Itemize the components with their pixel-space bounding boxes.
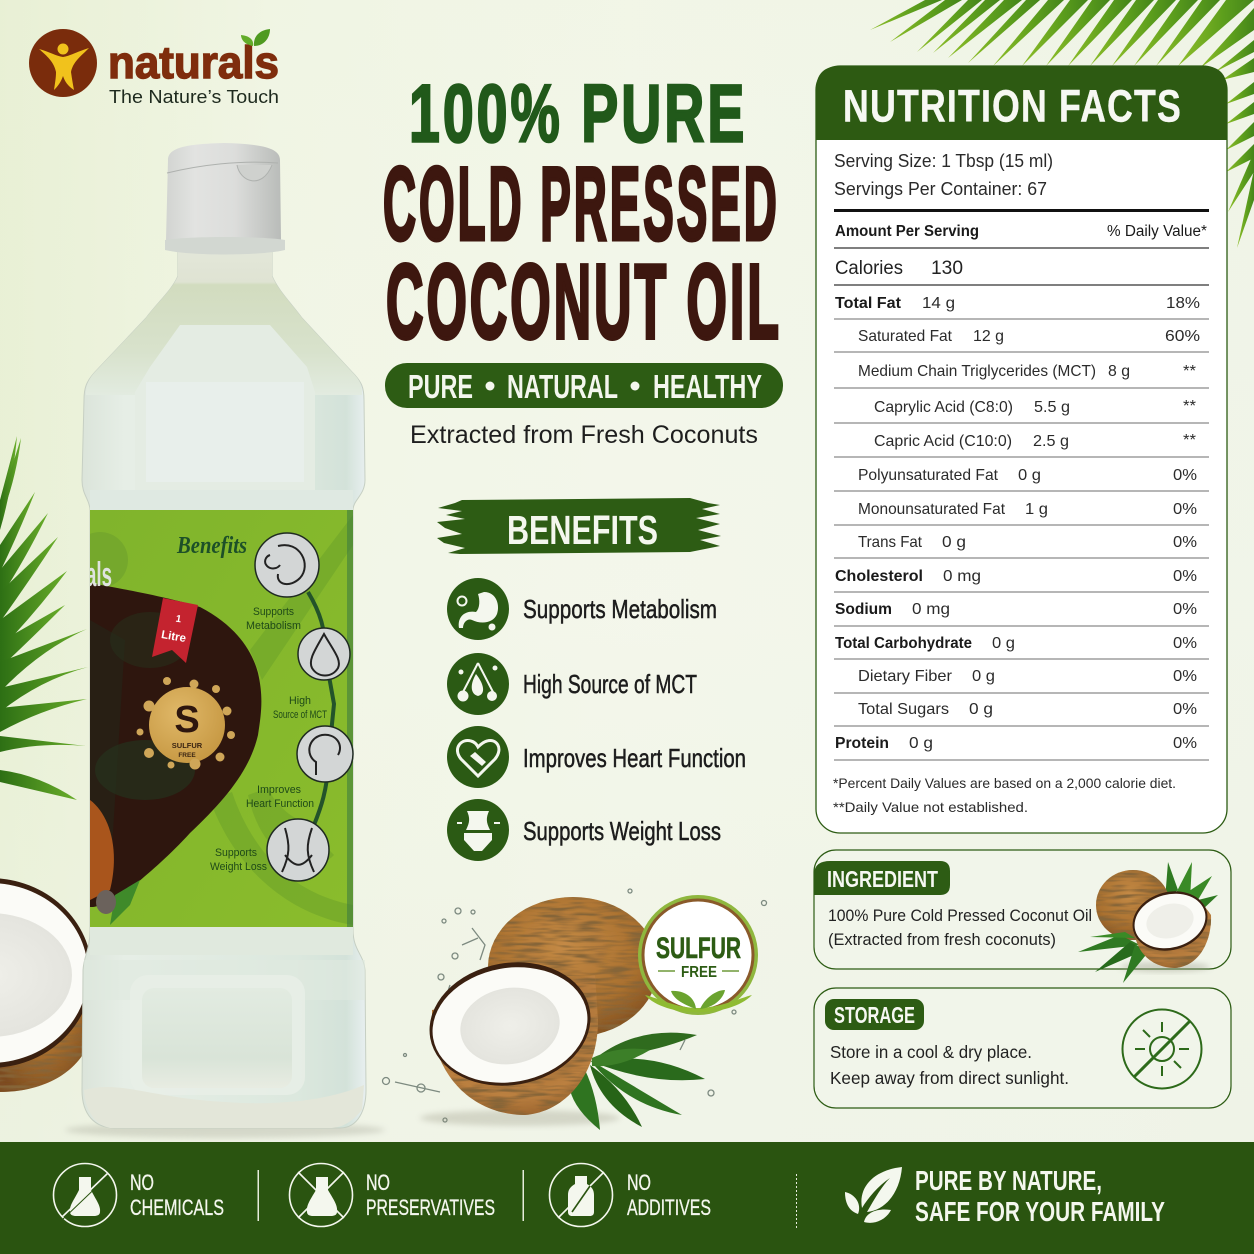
label icon circles: [255, 533, 353, 881]
footer slogan: [915, 1165, 1165, 1227]
ingredient label: INGREDIENT: [827, 866, 938, 892]
tagline pill: [385, 363, 783, 408]
row: protein: [835, 735, 1197, 752]
row: total carbohydrate: [835, 635, 1197, 652]
badge leaves: [645, 995, 752, 1012]
no chemicals: CHEMICALS: [130, 1195, 224, 1220]
row: trans fat: Trans Fat: [858, 534, 923, 551]
no preservatives: NO: [366, 1170, 390, 1195]
row: caprylic acid: 5.5 g: [1034, 399, 1070, 416]
sulfur free badge: SULFUR: [656, 932, 741, 965]
row: capric acid: **: [1183, 432, 1196, 449]
benefit: metabolism: Supports Metabolism: [523, 594, 717, 624]
icon: leaves: [845, 1167, 902, 1223]
logo: [29, 29, 279, 107]
row: caprylic acid: Caprylic Acid (C8:0): [874, 399, 1013, 416]
row: mct: **: [1183, 363, 1196, 380]
row: total fat: 18%: [1166, 295, 1200, 312]
sulfur free badge: FREE: [681, 964, 717, 981]
icon: no preservatives: [290, 1164, 352, 1226]
table header: % Daily Value*: [1107, 223, 1207, 240]
icon: no chemicals: [54, 1164, 116, 1226]
storage label: [825, 999, 924, 1030]
no preservatives: PRESERVATIVES: [366, 1195, 495, 1220]
icon: no sunlight: [1122, 1010, 1202, 1088]
row: cholesterol: Cholesterol: [835, 568, 923, 585]
row: dietary fiber: 0%: [1173, 668, 1197, 685]
row: capric acid: [874, 432, 1196, 450]
row: total sugars: 0 g: [969, 701, 993, 718]
row: mct: 8 g: [1108, 363, 1130, 380]
label sulfur free seal: [136, 677, 235, 770]
footer band: [0, 1142, 1254, 1254]
row: polyunsaturated: 0 g: [1018, 467, 1041, 484]
row: total sugars: [858, 701, 1197, 718]
calories row: Calories: [835, 258, 903, 279]
bottle cap: [165, 143, 285, 254]
footnotes: [833, 775, 1176, 815]
label sulfur free seal: FREE: [178, 752, 196, 759]
calories row: [835, 258, 963, 279]
footer slogan: SAFE FOR YOUR FAMILY: [915, 1196, 1165, 1227]
label sulfur free seal: SULFUR: [172, 741, 203, 750]
label benefit captions: Improves: [257, 784, 301, 796]
row: sodium: 0 mg: [912, 601, 950, 618]
label litre ribbon: 1: [175, 614, 183, 626]
row: monounsaturated: [858, 501, 1197, 518]
row: total carbohydrate: 0%: [1173, 635, 1197, 652]
row: total fat: Total Fat: [835, 295, 902, 312]
benefit: weight: Supports Weight Loss: [523, 816, 721, 846]
footnotes: *Percent Daily Values are based on a 2,000 calorie diet.: [833, 775, 1176, 791]
coconut group with water splash: [382, 889, 766, 1130]
label icon glyphs: [265, 545, 340, 872]
row: cholesterol: 0 mg: [943, 568, 981, 585]
row: dietary fiber: 0 g: [972, 668, 995, 685]
row: total carbohydrate: 0 g: [992, 635, 1015, 652]
row: monounsaturated: 1 g: [1025, 501, 1048, 518]
ingredient text: [828, 907, 1092, 949]
label benefit captions: [210, 606, 327, 873]
row: caprylic acid: **: [1183, 398, 1196, 415]
table header: [835, 223, 1207, 240]
row: capric acid: Capric Acid (C10:0): [874, 433, 1012, 450]
footnotes: **Daily Value not established.: [833, 799, 1028, 815]
icon: no additives: [550, 1164, 612, 1226]
row: polyunsaturated: Polyunsaturated Fat: [858, 467, 999, 484]
label benefits script: Benefits: [176, 533, 247, 559]
serving info: Servings Per Container: 67: [834, 179, 1047, 199]
label benefit captions: Metabolism: [246, 620, 301, 632]
ingredient coconut illustration: [1078, 862, 1218, 983]
row: monounsaturated: 0%: [1173, 501, 1197, 518]
row: polyunsaturated: [858, 467, 1197, 484]
row: monounsaturated: Monounsaturated Fat: [858, 501, 1006, 518]
label litre ribbon: [152, 598, 198, 663]
row: total fat: 14 g: [922, 295, 955, 312]
footer slogan: PURE BY NATURE,: [915, 1165, 1102, 1196]
panel: ingredient: [814, 850, 1231, 983]
benefit: mct: [447, 653, 697, 715]
row: sodium: Sodium: [835, 601, 892, 618]
table header: Amount Per Serving: [835, 223, 979, 240]
row: protein: 0%: [1173, 735, 1197, 752]
row: dietary fiber: Dietary Fiber: [858, 668, 953, 685]
tagline pill: NATURAL: [507, 368, 618, 405]
benefit: weight: [447, 799, 721, 861]
logo leaf: [241, 29, 270, 46]
ingredient text: (Extracted from fresh coconuts): [828, 931, 1056, 949]
row: sodium: [835, 601, 1197, 618]
logo wordmark: naturals: [108, 37, 279, 88]
benefits heading brush: [437, 498, 721, 554]
label sulfur free seal: S: [174, 699, 200, 741]
label benefit captions: Weight Loss: [210, 861, 267, 873]
logo emblem: [29, 29, 97, 97]
label logo fragment: als: [86, 556, 112, 594]
subtitle: Extracted from Fresh Coconuts: [410, 421, 758, 449]
no additives: NO: [627, 1170, 651, 1195]
row: saturated fat: 12 g: [973, 328, 1004, 345]
title: [383, 68, 779, 361]
row: total sugars: Total Sugars: [858, 701, 949, 718]
bottle base panel: [84, 927, 365, 1128]
nutrition header: [816, 66, 1227, 140]
row: capric acid: 2.5 g: [1033, 433, 1069, 450]
row: total fat: [835, 295, 1200, 312]
label benefit captions: Supports: [215, 847, 257, 859]
panel: storage: [814, 988, 1231, 1108]
calories row: 130: [931, 258, 963, 279]
benefit: mct: High Source of MCT: [523, 669, 697, 699]
palm leaves: [570, 1033, 705, 1130]
no additives: ADDITIVES: [627, 1195, 711, 1220]
ingredient text: 100% Pure Cold Pressed Coconut Oil: [828, 907, 1092, 925]
row: polyunsaturated: 0%: [1173, 467, 1197, 484]
row: cholesterol: [835, 568, 1197, 585]
benefit: metabolism: [447, 578, 717, 640]
tagline pill: PURE: [408, 368, 473, 405]
bottle body: [82, 250, 366, 1128]
row: total sugars: 0%: [1173, 701, 1197, 718]
row: caprylic acid: [874, 398, 1196, 416]
palm fronds: left: [0, 436, 88, 800]
left coconut half: [0, 878, 92, 1092]
row: total carbohydrate: Total Carbohydrate: [835, 635, 972, 652]
tagline: The Nature’s Touch: [109, 86, 279, 107]
water droplets: [382, 889, 766, 1122]
palm fronds: top right: [870, 0, 1254, 248]
no chemicals: NO: [130, 1170, 154, 1195]
row: mct: Medium Chain Triglycerides (MCT): [858, 363, 1096, 380]
nutrition header: NUTRITION FACTS: [843, 81, 1181, 131]
benefits section: [437, 498, 746, 861]
storage text: Store in a cool & dry place.: [830, 1042, 1032, 1062]
row: saturated fat: Saturated Fat: [858, 328, 953, 345]
row: trans fat: [858, 534, 1197, 551]
storage text: [830, 1042, 1069, 1088]
benefit: heart: Improves Heart Function: [523, 743, 746, 773]
label benefit captions: Heart Function: [246, 798, 314, 810]
serving info: [834, 151, 1053, 199]
ingredient label: [814, 861, 950, 895]
title line 1: 100% PURE: [409, 68, 744, 159]
row: trans fat: 0 g: [942, 534, 966, 551]
row: trans fat: 0%: [1173, 534, 1197, 551]
title line 3: COCONUT OIL: [386, 241, 779, 361]
row: saturated fat: 60%: [1165, 328, 1200, 345]
label benefit captions: High: [289, 695, 311, 707]
label benefit captions: Supports: [253, 606, 294, 618]
no preservatives: [290, 1164, 495, 1226]
row: protein: Protein: [835, 735, 889, 752]
serving info: Serving Size: 1 Tbsp (15 ml): [834, 151, 1053, 171]
benefit: heart: [447, 726, 746, 788]
tagline pill: HEALTHY: [653, 368, 762, 405]
panel: nutrition facts: [816, 66, 1227, 833]
label connector: [308, 592, 334, 825]
storage label: STORAGE: [834, 1002, 915, 1028]
row: protein: 0 g: [909, 735, 933, 752]
benefits heading brush: BENEFITS: [507, 507, 658, 553]
half coconut: [432, 975, 598, 1115]
row: cholesterol: 0%: [1173, 568, 1197, 585]
storage text: Keep away from direct sunlight.: [830, 1068, 1069, 1088]
title line 2: COLD PRESSED: [383, 146, 777, 263]
bottle label: [72, 510, 353, 927]
row: saturated fat: [858, 328, 1200, 345]
sulfur free badge: [638, 895, 758, 1015]
whole coconut: [488, 897, 658, 1037]
row: sodium: 0%: [1173, 601, 1197, 618]
product bottle: [65, 143, 385, 1138]
row: dietary fiber: [858, 668, 1197, 685]
label litre ribbon: Litre: [160, 629, 187, 645]
label benefit captions: Source of MCT: [273, 709, 327, 721]
no additives: [550, 1164, 711, 1226]
no chemicals: [54, 1164, 224, 1226]
